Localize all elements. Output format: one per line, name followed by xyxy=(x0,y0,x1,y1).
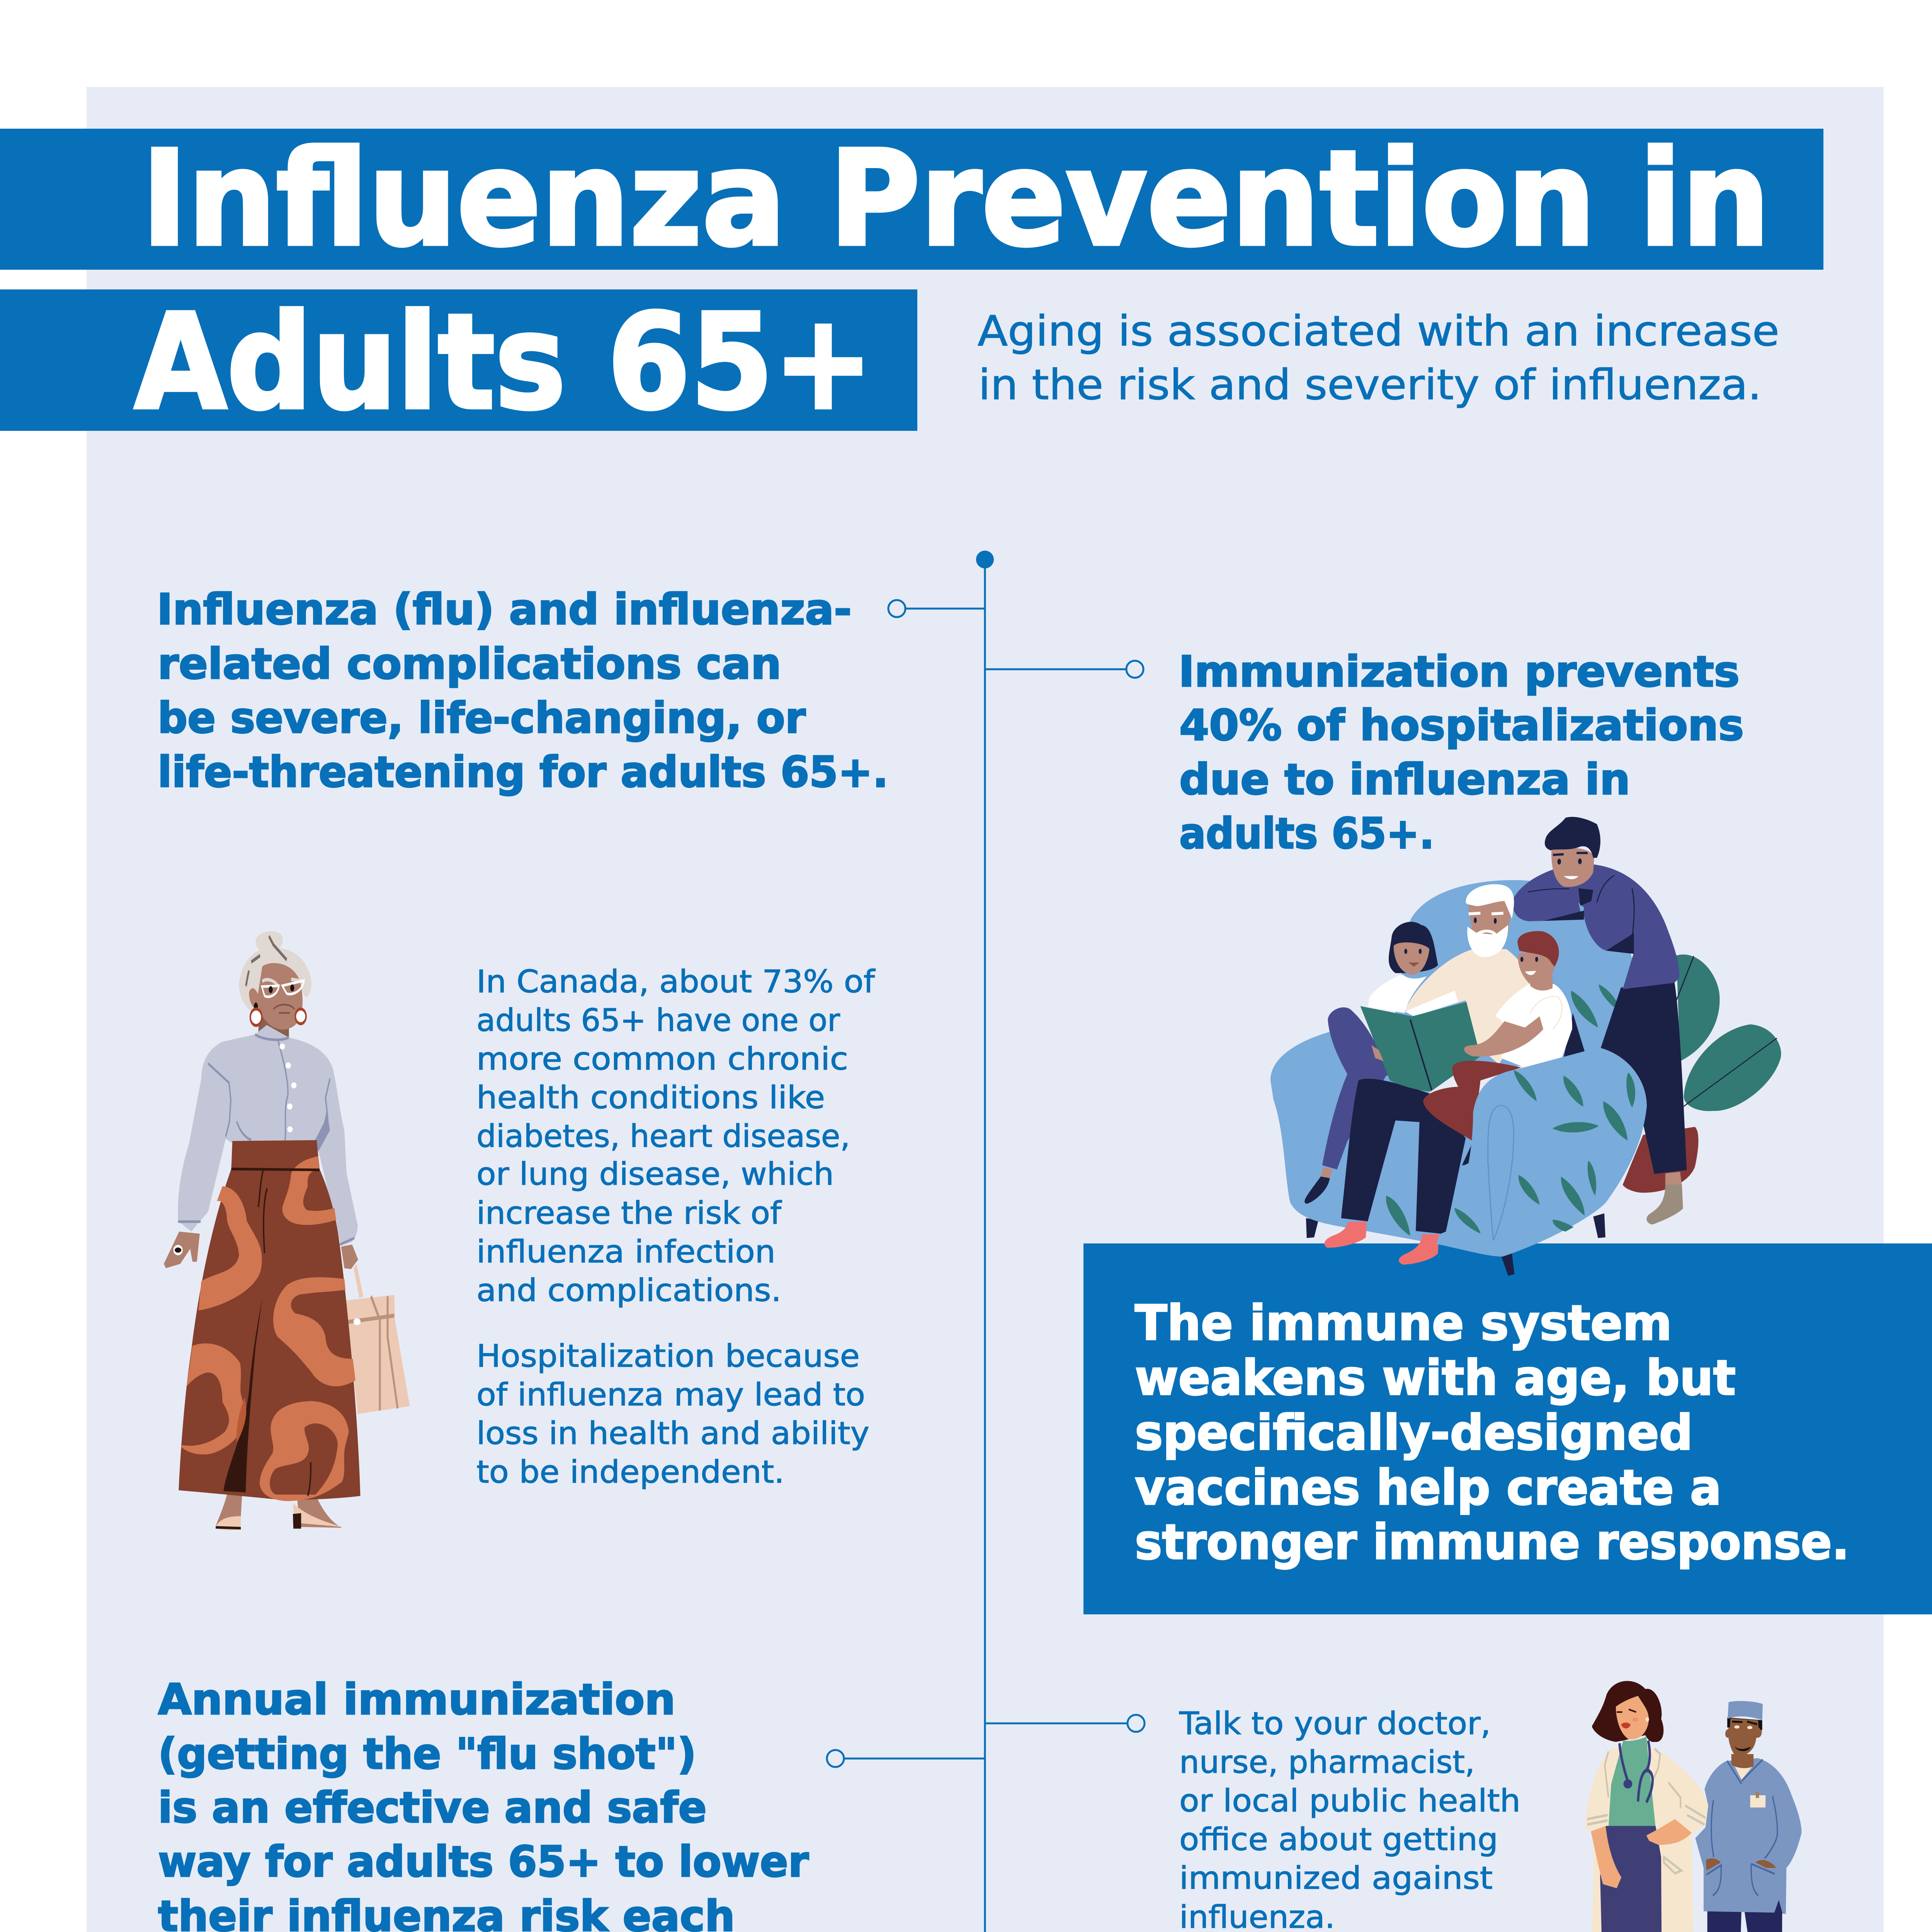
body text: chronic conditions and hospitalization: diabetes, heart disease, xyxy=(476,1118,850,1154)
doctor head xyxy=(1592,1681,1663,1742)
plant and pot xyxy=(1676,954,1720,1061)
callout: immune system panel: stronger immune response. xyxy=(1135,1514,1849,1570)
body text: chronic conditions and hospitalization: Hospitalization because xyxy=(476,1338,860,1374)
heading: immunization prevents: 40% of hospitalizations xyxy=(1179,701,1744,750)
grandfather torso and head xyxy=(1405,949,1530,1065)
chair back and seat xyxy=(1384,880,1632,1080)
body text: chronic conditions and hospitalization xyxy=(476,964,876,1490)
body text: chronic conditions and hospitalization: to be independent. xyxy=(476,1454,784,1490)
shirt xyxy=(178,1025,358,1246)
callout: immune system panel: vaccines help create a xyxy=(1135,1460,1721,1516)
body text: chronic conditions and hospitalization: influenza infection xyxy=(476,1234,776,1270)
chair front arm xyxy=(1436,1048,1647,1257)
subtitle text xyxy=(978,307,1779,409)
standing man xyxy=(1600,983,1687,1174)
heading: annual immunization: is an effective and safe xyxy=(158,1783,707,1832)
nurse head xyxy=(1731,1754,1753,1768)
body text: chronic conditions and hospitalization: health conditions like xyxy=(476,1080,825,1116)
heading: annual immunization: (getting the "flu shot") xyxy=(158,1729,696,1779)
heading: flu complications: Influenza (flu) and influenza- xyxy=(157,585,852,634)
timeline connector xyxy=(827,551,1145,1932)
body text: chronic conditions and hospitalization: loss in health and ability xyxy=(476,1415,869,1451)
heading: flu complications: related complications can xyxy=(158,639,781,689)
nurse scrubs xyxy=(1695,1758,1801,1914)
heading: annual immunization: way for adults 65+ to lower xyxy=(158,1837,809,1886)
neck and face xyxy=(258,1005,289,1037)
body text: chronic conditions and hospitalization: In Canada, about 73% of xyxy=(476,964,876,1000)
illustration: family on armchair xyxy=(1270,817,1781,1276)
heading: annual immunization: Annual immunization xyxy=(158,1675,675,1724)
doctor top, skirt xyxy=(1609,1736,1656,1827)
callout: immune system panel xyxy=(1083,1243,1932,1614)
body text: chronic conditions and hospitalization: of influenza may lead to xyxy=(476,1377,865,1413)
body text: chronic conditions and hospitalization: increase the risk of xyxy=(476,1195,782,1231)
illustration: doctor and nurse xyxy=(1585,1681,1801,1932)
hands xyxy=(164,1231,200,1268)
body text: talk to your doctor: office about getting xyxy=(1179,1821,1498,1857)
heading: immunization prevents: due to influenza in xyxy=(1179,755,1630,804)
body text: talk to your doctor: immunized against xyxy=(1179,1860,1493,1896)
chair legs xyxy=(1306,1213,1605,1276)
heading: immunization prevents: Immunization prevents xyxy=(1179,647,1740,696)
feet xyxy=(216,1490,242,1526)
body text: talk to your doctor xyxy=(1179,1706,1520,1932)
body text: chronic conditions and hospitalization: more common chronic xyxy=(476,1041,848,1077)
title banner line 1: Influenza Prevention in xyxy=(141,122,1770,276)
callout: immune system panel: The immune system xyxy=(1135,1295,1672,1351)
girl xyxy=(1389,922,1438,973)
heading: flu complications xyxy=(157,585,888,797)
boy xyxy=(1564,1013,1585,1057)
heading: flu complications: life-threatening for adults 65+. xyxy=(158,747,888,797)
body text: chronic conditions and hospitalization: or lung disease, which xyxy=(476,1156,834,1192)
callout: immune system panel: weakens with age, but xyxy=(1135,1350,1736,1406)
grandfather legs and socks xyxy=(1341,1079,1466,1234)
hair bun xyxy=(256,931,283,952)
doctor coat xyxy=(1585,1746,1708,1932)
bag xyxy=(354,1264,363,1298)
skirt xyxy=(179,1140,361,1500)
heading: annual immunization xyxy=(158,1675,809,1932)
heading: immunization prevents: adults 65+. xyxy=(1179,809,1434,858)
heading: flu complications: be severe, life-changing, or xyxy=(158,693,806,743)
nurse trousers and shoes xyxy=(1708,1910,1782,1932)
body text: chronic conditions and hospitalization: adults 65+ have one or xyxy=(476,1002,840,1038)
open book xyxy=(1405,991,1458,1016)
subtitle text: in the risk and severity of influenza. xyxy=(978,361,1762,409)
callout: immune system panel: specifically-designed xyxy=(1135,1405,1693,1461)
body text: chronic conditions and hospitalization: and complications. xyxy=(476,1272,781,1308)
title banner line 2: Adults 65+ xyxy=(134,286,873,439)
subtitle text: Aging is associated with an increase xyxy=(978,307,1779,355)
stethoscope xyxy=(1619,1740,1653,1802)
illustration: older woman with bag xyxy=(164,931,410,1530)
body text: talk to your doctor: Talk to your doctor, xyxy=(1179,1706,1491,1742)
body text: talk to your doctor: nurse, pharmacist, xyxy=(1179,1744,1475,1780)
heading: immunization prevents xyxy=(1179,647,1744,858)
body text: talk to your doctor: or local public health xyxy=(1179,1783,1520,1819)
